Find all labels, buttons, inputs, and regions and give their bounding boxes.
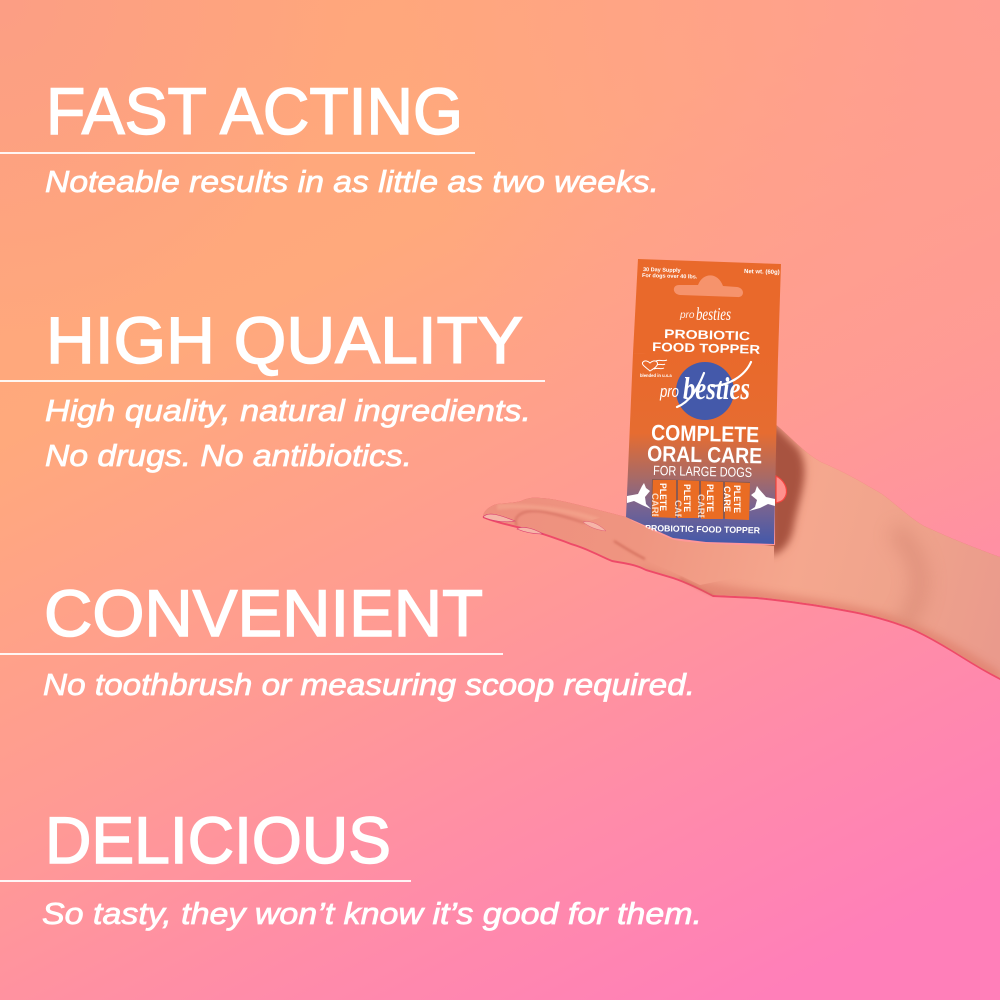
back card text: [642, 267, 780, 357]
window with sachets: CARE: [695, 494, 706, 521]
heading: delicious: DELICIOUS: [45, 803, 391, 877]
benefit: delicious: [0, 803, 702, 931]
window with sachets: PLETE: [657, 483, 668, 511]
window with sachets: PLETE: [731, 485, 742, 513]
logo badge: besties: [683, 370, 750, 406]
divider: fast acting: [0, 152, 475, 154]
benefit: high quality: [0, 303, 545, 473]
back card text: FOOD TOPPER: [652, 340, 760, 357]
description: convenient: No toothbrush or measuring scoop required.: [43, 667, 695, 702]
dog silhouette right: [749, 486, 775, 511]
window with sachets: CARE: [721, 486, 732, 512]
hand holding product: [482, 425, 1000, 680]
benefit: convenient: [0, 576, 695, 702]
palm shadow: [768, 418, 805, 556]
thumb base crease: [680, 578, 713, 595]
product title: [647, 420, 762, 480]
lower edge shading: [644, 568, 1000, 678]
finger highlight: [498, 504, 598, 520]
benefit: fast acting: [0, 74, 659, 199]
divider: delicious: [0, 880, 411, 882]
divider: convenient: [0, 653, 503, 655]
product title: FOR LARGE DOGS: [653, 463, 752, 480]
back card text: For dogs over 40 lbs.: [642, 273, 698, 280]
back card text: besties: [696, 304, 731, 324]
finger separation: [516, 511, 585, 526]
dog silhouette left: [627, 483, 651, 509]
thumbnail: [583, 522, 606, 531]
window with sachets: [651, 479, 750, 520]
heading: convenient: CONVENIENT: [44, 576, 483, 650]
description: high quality: High quality, natural ingredients.: [45, 393, 531, 428]
window with sachets: PLETE: [704, 484, 715, 512]
product box: [626, 259, 781, 544]
box: back card: [633, 259, 781, 358]
description: fast acting: Noteable results in as little as two weeks.: [45, 164, 659, 199]
logo badge: pro: [659, 382, 679, 401]
description: high quality: [45, 393, 531, 473]
heading: high quality: HIGH QUALITY: [46, 303, 523, 377]
wrist crease: [895, 530, 920, 630]
logo badge: [659, 362, 751, 420]
back card text: pro: [679, 310, 695, 321]
fingernails: [483, 514, 543, 534]
box: front panel: [626, 353, 778, 544]
blended in USA: blended in u.s.a: [640, 373, 672, 378]
description: high quality: No drugs. No antibiotics.: [45, 438, 412, 473]
description: delicious: So tasty, they won’t know it’s good for them.: [42, 896, 702, 931]
product title: COMPLETE: [651, 420, 759, 447]
gap between box and hand: [776, 476, 787, 503]
window with sachets: CARE: [649, 493, 660, 520]
bottom label: PROBIOTIC FOOD TOPPER: [645, 523, 761, 535]
heading: fast acting: FAST ACTING: [46, 74, 463, 148]
back card text: Net wt. (60g): [744, 269, 780, 276]
thumb over box: [583, 517, 774, 595]
hang tab: [674, 275, 743, 297]
window with sachets: CARE: [672, 500, 683, 527]
back card text: PROBIOTIC: [664, 327, 750, 343]
thumb crease: [614, 541, 645, 559]
back card text: 30 Day Supply: [643, 267, 682, 274]
window with sachets: PLETE: [681, 484, 692, 512]
hand: rim light: [483, 424, 1000, 680]
postmark icon: [642, 360, 667, 371]
hand: palm and fingers: [483, 426, 1000, 678]
product title: ORAL CARE: [647, 441, 762, 468]
divider: high quality: [0, 380, 545, 382]
